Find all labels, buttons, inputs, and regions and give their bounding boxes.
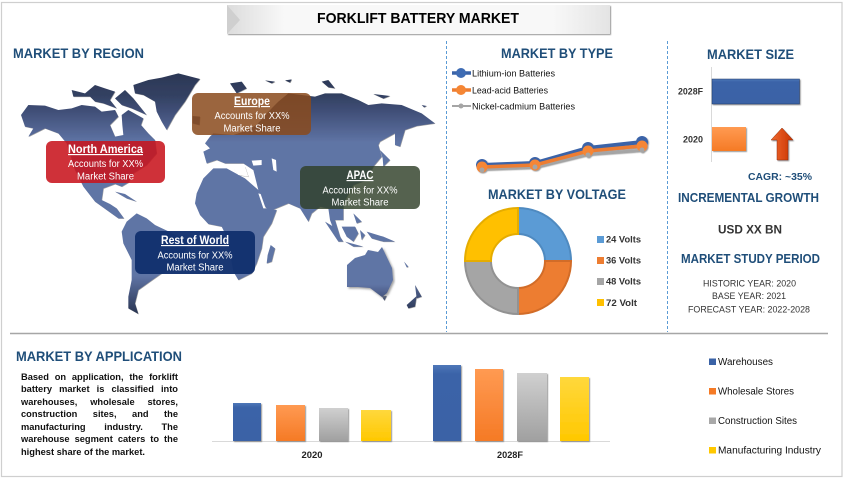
heading: market by type: MARKET BY TYPE — [501, 45, 613, 61]
callout: rest of world: Rest of World — [161, 235, 229, 247]
callout: rest of world — [135, 231, 255, 274]
value: incremental growth: USD XX BN — [718, 222, 782, 236]
donut chart — [465, 208, 571, 314]
panel: market by region — [13, 45, 435, 314]
application description text: construction sites, and the — [21, 409, 178, 419]
callout: apac: Accounts for XX% — [322, 186, 398, 196]
arrow: growth — [771, 128, 793, 160]
callout: apac — [300, 166, 420, 209]
bar chart: market size: 2028F — [678, 86, 703, 96]
legend: application: Wholesale Stores — [718, 386, 794, 398]
application description text: Based on application, the forklift — [21, 372, 178, 382]
callout: apac: Market Share — [332, 198, 389, 208]
application description text: warehouses, wholesale stores, — [21, 397, 178, 407]
callout: rest of world: Market Share — [166, 262, 224, 274]
heading: incremental growth: INCREMENTAL GROWTH — [678, 191, 819, 205]
heading: market size: MARKET SIZE — [707, 46, 794, 62]
map: australia — [347, 247, 393, 297]
study period details — [688, 278, 810, 316]
application description text: warehouse segment caters to the — [21, 434, 178, 444]
legend: voltage: 48 Volts — [606, 276, 641, 286]
line chart: type — [476, 136, 648, 172]
legend: voltage — [597, 234, 641, 308]
heading: market by region: MARKET BY REGION — [13, 45, 144, 61]
legend: voltage: 36 Volts — [606, 256, 641, 266]
legend: application — [709, 357, 821, 456]
application description text: manufacturing industry. The — [21, 422, 178, 432]
callout: europe: Market Share — [224, 124, 281, 134]
application description text: battery market is classified into — [21, 384, 178, 394]
legend: application: Warehouses — [718, 357, 773, 368]
title banner: FORKLIFT BATTERY MARKET — [317, 10, 519, 27]
legend: type: Lithium-ion Batteries — [472, 68, 555, 78]
callout: rest of world: Accounts for XX% — [158, 250, 233, 262]
bar chart: application: 2028F — [497, 450, 523, 460]
study period details: BASE YEAR: 2021 — [712, 291, 786, 302]
callout: europe — [192, 93, 311, 135]
callout: north america: North America — [68, 144, 144, 156]
legend: application: Manufacturing Industry — [718, 446, 821, 456]
panel: market by type — [452, 45, 648, 172]
legend: type: Lead-acid Batteries — [472, 86, 548, 96]
legend: type: Nickel-cadmium Batteries — [472, 102, 576, 112]
panel: market by application — [16, 348, 821, 460]
callout: europe: Accounts for XX% — [214, 111, 290, 122]
bar chart: application: 2020 — [302, 450, 322, 460]
heading: market by application: MARKET BY APPLICATION — [16, 348, 182, 364]
callout: north america: Market Share — [77, 172, 134, 182]
study period details: HISTORIC YEAR: 2020 — [703, 278, 796, 290]
bar chart: market size: 2020 — [683, 134, 703, 144]
callout: apac: APAC — [346, 170, 374, 182]
callout: north america: Accounts for XX% — [68, 159, 143, 170]
legend: type — [452, 68, 576, 112]
cagr label: CAGR: ~35% — [748, 171, 813, 183]
panel: market by voltage — [465, 186, 641, 314]
callout: north america — [46, 141, 165, 183]
title banner — [227, 5, 610, 34]
panel: market size — [678, 46, 820, 316]
world map — [21, 73, 435, 314]
legend: application: Construction Sites — [718, 416, 797, 427]
study period details: FORECAST YEAR: 2022-2028 — [688, 304, 810, 316]
bar chart: market size — [678, 67, 800, 162]
application description text — [21, 372, 178, 457]
bar chart: application — [212, 365, 610, 460]
heading: market by voltage: MARKET BY VOLTAGE — [488, 186, 626, 202]
application description text: highest share of the market. — [21, 447, 145, 457]
heading: market study period: MARKET STUDY PERIOD — [681, 252, 820, 266]
legend: voltage: 72 Volt — [606, 298, 637, 308]
callout: europe: Europe — [234, 96, 270, 108]
legend: voltage: 24 Volts — [606, 234, 641, 244]
